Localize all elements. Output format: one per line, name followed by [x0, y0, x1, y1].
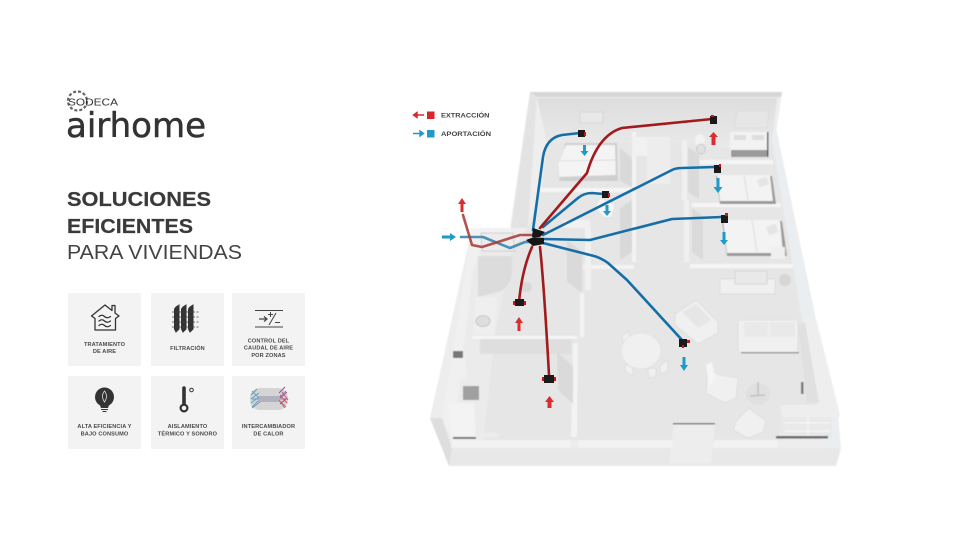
- hub: central ventilation unit: [526, 228, 545, 246]
- logo: Sodeca airhome: [66, 92, 206, 146]
- icon: filter: [172, 305, 199, 332]
- Sodeca wordmark: SODECA: [68, 98, 119, 108]
- floor: [483, 140, 822, 440]
- arrow: intake in: [442, 233, 456, 241]
- arrow: right bedroom 2 supply: [720, 232, 728, 245]
- shower: [478, 256, 512, 297]
- heading: soluciones eficientes para viviendas: EFICIENTES: [67, 215, 193, 238]
- toilet: [695, 134, 706, 154]
- TV unit: [720, 271, 791, 294]
- panel: control del caudal: [232, 293, 305, 366]
- interior partition walls: [472, 160, 793, 339]
- duct: to room 2: [543, 193, 603, 227]
- arrow: bath extract: [709, 132, 718, 145]
- legend item: extracción: EXTRACCIÓN: [441, 110, 490, 120]
- terminal: right bedroom 1: [714, 164, 721, 173]
- floor plan: apartment 3D model: [430, 92, 841, 466]
- wall faces and door panels: [620, 148, 632, 260]
- sofa: [738, 320, 799, 354]
- duct: to top-left bedroom: [533, 133, 580, 230]
- bed: right lower: [722, 220, 787, 259]
- label: CONTROL DEL: [248, 338, 290, 344]
- heading: soluciones eficientes para viviendas: PARA VIVIENDAS: [67, 241, 242, 264]
- kitchen: [448, 350, 499, 439]
- left outer wall: [442, 228, 483, 440]
- icon: heat exchanger: [250, 387, 288, 410]
- arrow: bedroom supply: [580, 145, 588, 156]
- wall shelves right: [803, 315, 837, 403]
- label: AISLAMIENTO: [168, 424, 208, 430]
- bookshelf: [776, 405, 840, 438]
- back wall: [537, 98, 777, 148]
- panel: aislamiento: [151, 376, 224, 449]
- terminal: room 2: [602, 191, 610, 198]
- ducts: external intake and exhaust: [461, 215, 534, 248]
- ducts: supply (blue): [533, 133, 722, 340]
- label: FILTRACIÓN: [170, 344, 205, 352]
- arrow: exhaust out: [458, 198, 466, 212]
- rocking chair: [706, 362, 738, 403]
- right rim: [771, 132, 841, 448]
- air units: terminals: [513, 115, 728, 383]
- duct: to right bedroom 1: [543, 167, 715, 235]
- washbasin room 2: [595, 198, 615, 218]
- label: ALTA EFICIENCIA Y: [77, 424, 132, 430]
- heading: soluciones eficientes para viviendas: SOLUCIONES: [67, 188, 211, 211]
- bottom wall top: [451, 440, 778, 448]
- icon: Sodeca gear: [68, 92, 87, 110]
- legend: extracción and aportación: [413, 110, 491, 138]
- exterior base face: [449, 448, 841, 466]
- arrow: living supply: [680, 357, 688, 371]
- duct: to right bedroom 2: [543, 217, 722, 240]
- label: BAJO CONSUMO: [81, 432, 129, 438]
- terminal: top-right bath: [710, 115, 717, 124]
- arrows: air flow: [442, 132, 728, 408]
- airhome wordmark: airhome: [66, 106, 206, 146]
- bed: right upper: [716, 175, 776, 204]
- dining table and chairs: [621, 331, 668, 378]
- arrow: bath extract lower: [515, 317, 523, 331]
- duct: to bath: [519, 247, 532, 302]
- icon: flow control: [255, 310, 283, 327]
- label: DE CALOR: [253, 432, 284, 438]
- left wall of bedroom: [511, 92, 537, 228]
- armchair lower: [733, 408, 766, 438]
- terminal: living: [679, 339, 690, 348]
- arrow: right bedroom 1 supply: [714, 178, 722, 193]
- label: TRATAMIENTO: [84, 342, 126, 348]
- outer shell: [430, 92, 841, 466]
- panel: tratamiento de aire: [68, 293, 141, 366]
- heading: soluciones eficientes para viviendas: [67, 188, 242, 264]
- terminal: kitchen: [542, 375, 556, 383]
- vanity: [730, 132, 768, 157]
- ducts: extraction (red): [519, 119, 712, 375]
- bed: top left: [558, 143, 618, 181]
- armchair: [675, 300, 718, 344]
- duct: to top-right bathroom: [540, 119, 712, 228]
- duct: to living room: [543, 243, 682, 340]
- duct: to kitchen: [540, 247, 549, 375]
- wall picture and mirror: [580, 112, 603, 123]
- icon: light bulb with leaf: [95, 388, 114, 412]
- terminal: bedroom: [578, 130, 586, 137]
- entry window: [470, 228, 512, 236]
- panel: alta eficiencia: [68, 376, 141, 449]
- label: INTERCAMBIADOR: [242, 424, 295, 430]
- label: POR ZONAS: [251, 353, 286, 359]
- label: CAUDAL DE AIRE: [244, 346, 293, 352]
- label: TÉRMICO Y SONORO: [158, 430, 218, 438]
- icon: thermometer: [181, 388, 193, 411]
- icon: house with air waves: [92, 305, 119, 330]
- arrow: room 2 supply: [603, 205, 611, 216]
- arrow: kitchen extract: [545, 396, 554, 408]
- sink and toilet bath: [474, 282, 532, 334]
- side table: [746, 382, 770, 405]
- terminal: right bedroom 2: [721, 213, 728, 223]
- panel: intercambiador: [232, 376, 305, 449]
- panel: filtración: [151, 293, 224, 366]
- bottom door: [669, 423, 715, 463]
- terminal: bath: [513, 299, 526, 306]
- legend item: aportación: APORTACIÓN: [441, 129, 491, 138]
- label: DE AIRE: [93, 349, 116, 355]
